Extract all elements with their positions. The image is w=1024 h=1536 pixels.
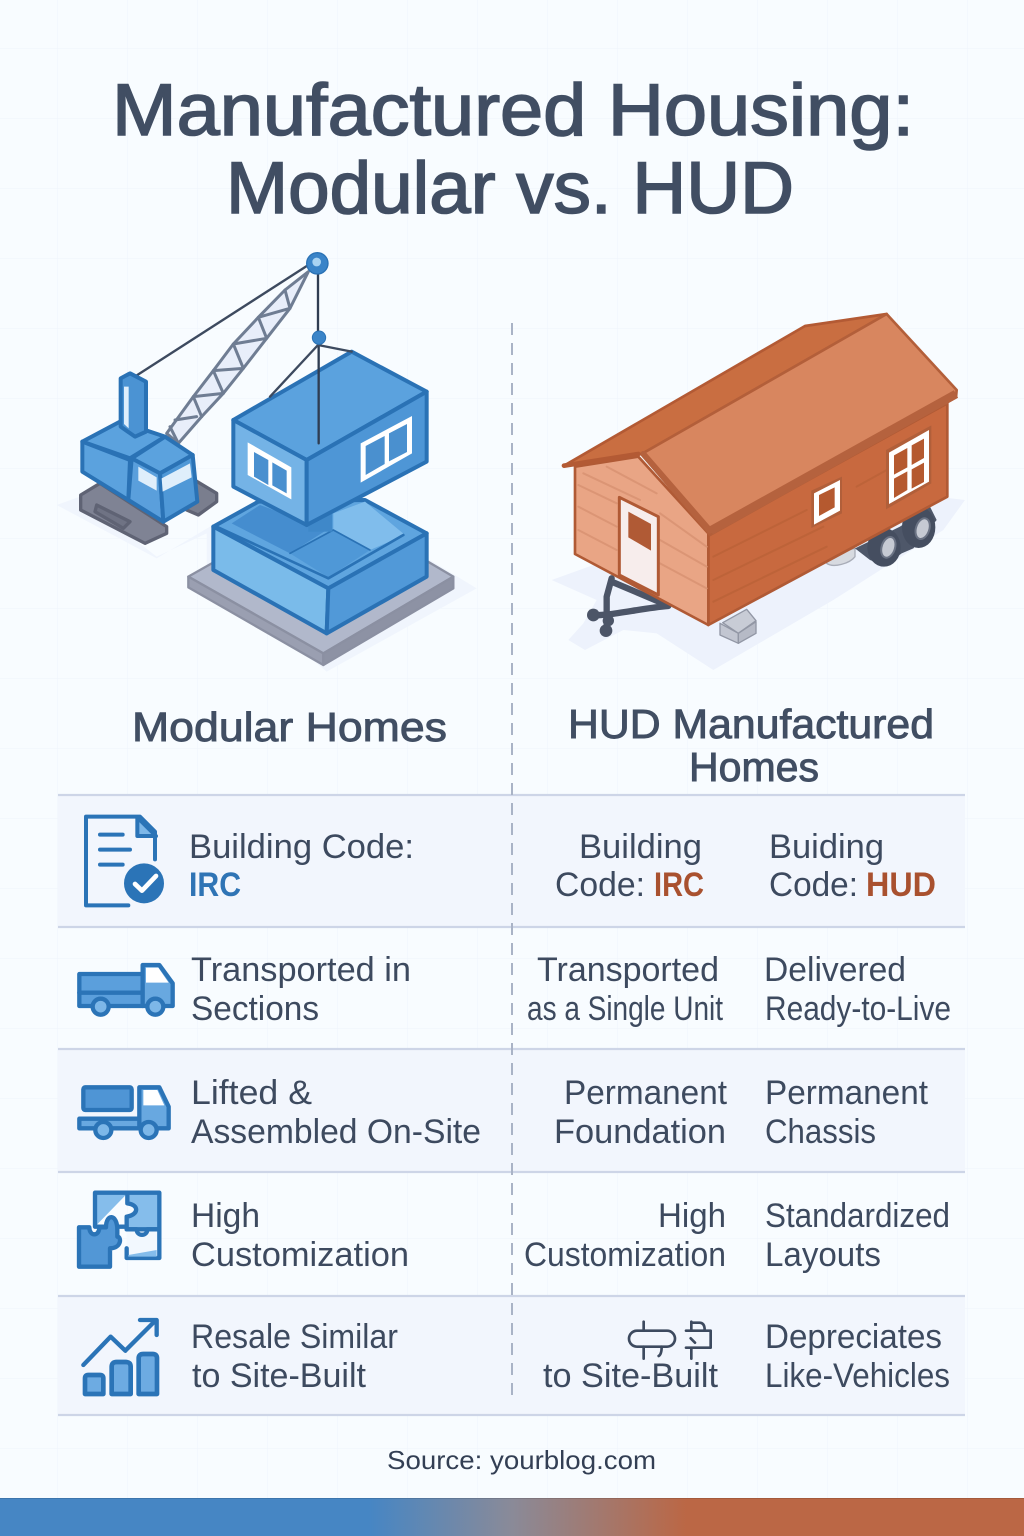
roof front slope — [642, 314, 957, 535]
foundation slab — [188, 500, 453, 665]
ground shadow — [57, 497, 477, 672]
connector column — [308, 510, 332, 532]
row 1 modular text: Building Code: — [189, 828, 414, 866]
row 1 HUD right text: Code: — [769, 866, 858, 904]
row 2 HUD left text: Transported — [537, 951, 719, 989]
row 2 HUD left text: as a Single Unit — [527, 990, 723, 1028]
heading: HUD manufactured homes: HUD Manufactured — [568, 701, 934, 747]
row 2 HUD left text — [527, 951, 723, 1028]
row 5 modular text — [191, 1318, 398, 1395]
row 5 modular text: Resale Similar — [191, 1318, 398, 1356]
row 1 modular text: IRC — [189, 866, 241, 904]
row 5 HUD right text: Depreciates — [765, 1318, 942, 1356]
row 3 modular text — [191, 1074, 481, 1151]
icon: truck with sections — [79, 965, 173, 1015]
title — [112, 70, 914, 229]
center dashed divider — [511, 323, 513, 1396]
row 2 HUD right text — [764, 951, 951, 1028]
lower module — [213, 500, 427, 633]
row 5 HUD right text: Like-Vehicles — [765, 1357, 950, 1395]
row 3 HUD right text — [765, 1074, 929, 1151]
lifted module — [233, 352, 427, 525]
row 5 modular text: to Site-Built — [192, 1357, 367, 1395]
long side wall — [708, 403, 947, 625]
roof rear slope — [564, 314, 887, 466]
title: Manufactured Housing: — [112, 70, 914, 151]
row 1 modular text — [189, 828, 414, 904]
row 3 modular text: Assembled On-Site — [191, 1113, 481, 1151]
roof eave trim — [711, 394, 956, 531]
row 1 HUD right text: Buiding — [769, 828, 884, 866]
row 1 HUD left text: IRC — [654, 866, 704, 904]
row 3 HUD left text: Permanent — [564, 1074, 728, 1112]
row 4 HUD left text: Customization — [524, 1236, 726, 1274]
row 1 HUD left text — [555, 828, 704, 904]
row 2 modular text — [191, 951, 411, 1028]
icon: rising bar chart — [83, 1320, 157, 1394]
row 1 HUD left text: Code: — [555, 866, 645, 904]
row 5 HUD right text — [765, 1318, 950, 1395]
icon: flatbed truck — [79, 1087, 169, 1138]
row 3 HUD left text: Foundation — [554, 1113, 726, 1151]
row 4 HUD left text — [524, 1197, 726, 1274]
row 3 modular text: Lifted & — [191, 1074, 312, 1112]
crane hook balls — [307, 253, 328, 344]
row 2 modular text: Transported in — [191, 951, 411, 989]
ground shadow — [552, 497, 965, 670]
row 1 HUD left text: Building — [579, 828, 702, 866]
cab windows — [124, 387, 192, 492]
row 5 HUD left garbled symbol and text — [543, 1322, 719, 1395]
heading: HUD manufactured homes: Homes — [689, 744, 819, 790]
row 4 modular text: High — [191, 1197, 260, 1235]
large window — [886, 425, 931, 509]
gable end wall — [575, 457, 708, 625]
heading: HUD manufactured homes — [568, 701, 934, 790]
footer gradient bar — [0, 1498, 1024, 1536]
row 3 HUD right text: Permanent — [765, 1074, 929, 1112]
row 4 HUD right text: Standardized — [765, 1197, 950, 1235]
illustration: modular home and crane — [57, 253, 477, 672]
tow hitch — [587, 578, 668, 637]
row 2 modular text: Sections — [191, 990, 319, 1028]
heading: modular homes: Modular Homes — [132, 704, 447, 750]
icon: document with check — [86, 817, 164, 905]
row 3 HUD right text: Chassis — [765, 1113, 876, 1151]
module windows — [248, 416, 412, 499]
crane boom — [167, 272, 308, 443]
row 2 HUD right text: Ready-to-Live — [765, 990, 951, 1028]
row 1 HUD right text — [769, 828, 936, 904]
crane tracks — [81, 479, 217, 543]
source line: Source: yourblog.com — [387, 1445, 656, 1475]
row 2 HUD right text: Delivered — [764, 951, 906, 989]
row 5 HUD left garbled symbol and text: to Site-Built — [543, 1357, 719, 1395]
row 4 HUD right text: Layouts — [765, 1236, 881, 1274]
small window — [811, 477, 842, 528]
door — [619, 497, 658, 595]
crane cables — [137, 265, 352, 443]
row 4 modular text — [191, 1197, 409, 1274]
title: Modular vs. HUD — [226, 148, 794, 229]
comparison table bands — [58, 795, 965, 1415]
crane cab — [82, 373, 197, 522]
row 4 HUD left text: High — [658, 1197, 726, 1235]
siding lines — [578, 467, 887, 602]
row 3 HUD left text — [554, 1074, 728, 1151]
trailer wheels — [827, 507, 937, 567]
icon: puzzle pieces — [79, 1193, 159, 1267]
row 4 HUD right text — [765, 1197, 950, 1274]
support block — [720, 609, 756, 643]
row 4 modular text: Customization — [191, 1236, 409, 1274]
row 1 HUD right text: HUD — [866, 866, 936, 904]
illustration: HUD manufactured home — [552, 314, 965, 670]
